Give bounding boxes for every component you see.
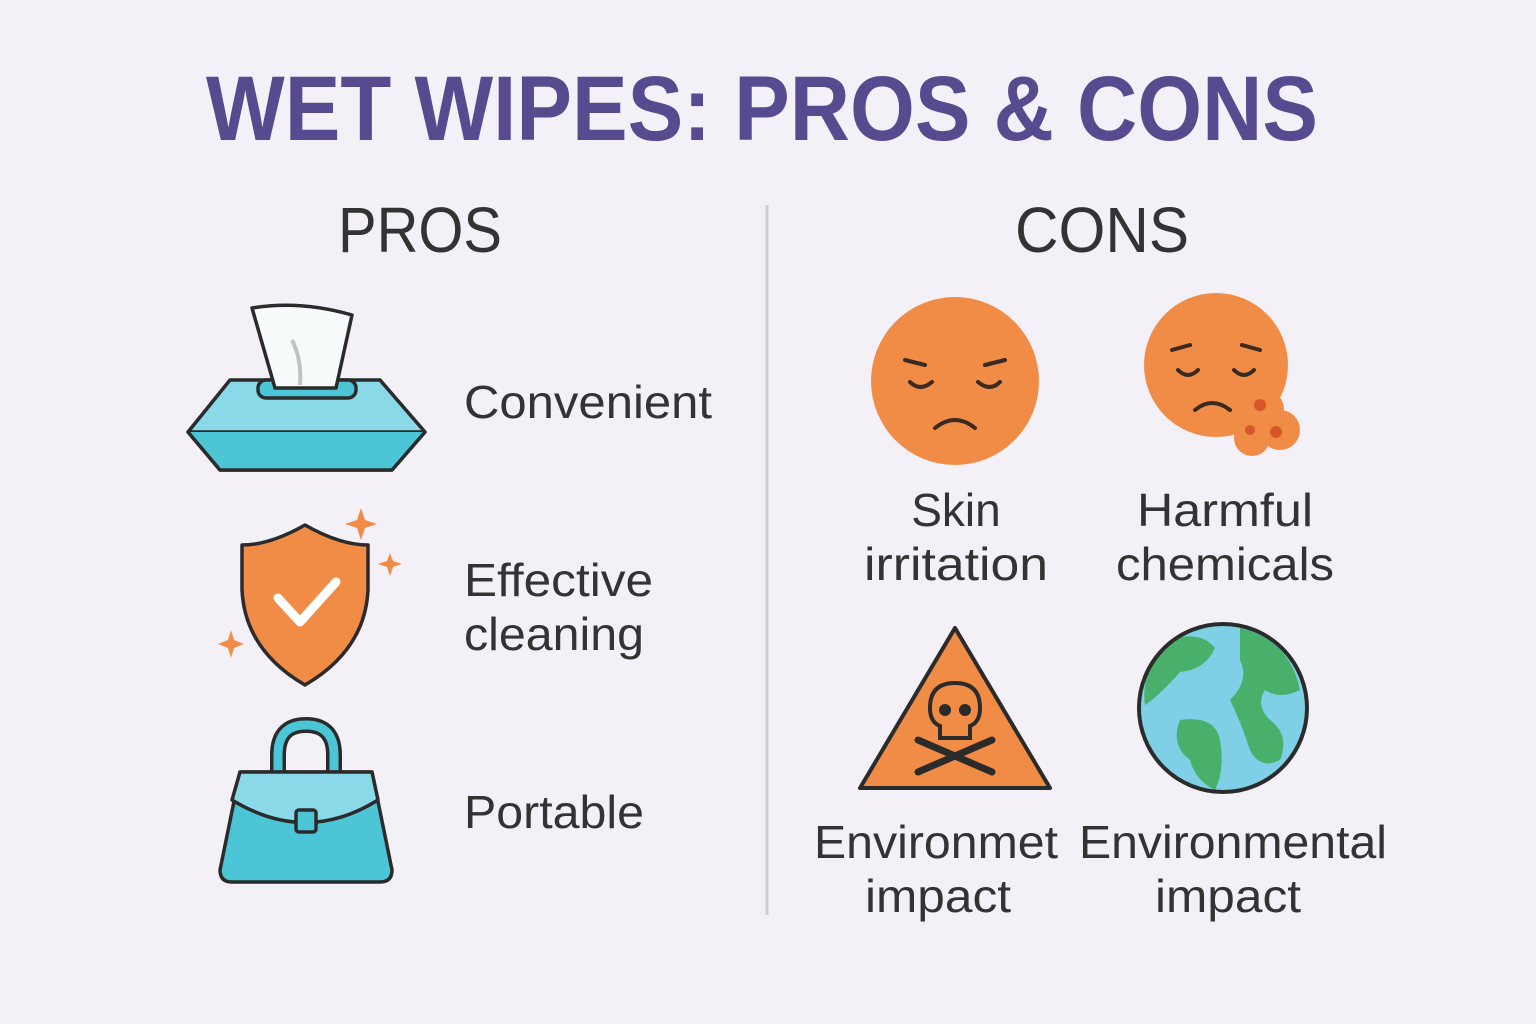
panel: cons: impact [1155,870,1301,922]
label: environmet impact: Environmet [814,816,1058,868]
label: effective cleaning: Effective [464,554,653,606]
panel: pros [188,305,712,882]
label: skin irritation: Skin [911,484,1001,536]
icon: bag [220,725,392,882]
panel: cons: chemicals [1116,538,1334,590]
icon: wipes box [188,305,425,470]
label: environmental impact: Environmental [1079,816,1387,868]
heading: pros: PROS [338,194,502,266]
icon: globe [1139,624,1307,792]
icon: hazard triangle [860,628,1050,788]
heading: cons: CONS [1015,194,1189,266]
icon: face with spots [1144,293,1300,456]
title: WET WIPES: PROS & CONS [206,58,1318,160]
label: portable: Portable [464,786,644,838]
panel: cons: irritation [864,538,1048,590]
panel: cons: impact [865,870,1011,922]
panel: pros: cleaning [464,608,644,660]
icon: sad face [871,297,1039,465]
label: harmful chemicals: Harmful [1137,484,1313,536]
panel: cons [814,293,1387,922]
icon: shield [218,508,402,685]
label: convenient: Convenient [464,376,712,428]
